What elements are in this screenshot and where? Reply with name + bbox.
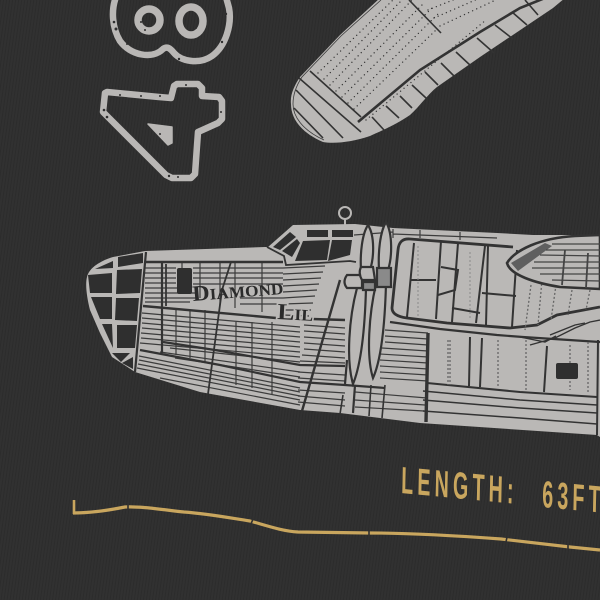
nose art: Diamond Lil: LIL	[277, 299, 314, 326]
antenna loop	[339, 207, 351, 225]
fuselage thin panel lines	[137, 229, 497, 411]
propeller	[344, 222, 391, 384]
number 8 outline	[113, 0, 230, 61]
number 4 outline	[103, 84, 222, 178]
nose glazing panes	[88, 253, 143, 369]
rivet lines on aft fuselage	[418, 246, 590, 392]
aft fuselage window	[556, 363, 578, 379]
wing rivet rows	[318, 0, 500, 120]
engine nacelle	[390, 239, 600, 435]
aircraft fuselage	[86, 207, 600, 437]
wing structure lines	[294, 0, 545, 138]
length label: LENGTH:	[401, 460, 518, 513]
fuselage heavy structural lines	[135, 252, 385, 418]
nose art: Diamond Lil: DIAMOND	[191, 274, 284, 306]
top wing	[291, 0, 565, 143]
cockpit canopy panes	[267, 230, 356, 265]
length label	[401, 460, 600, 522]
fuselage side window	[177, 268, 192, 294]
dorsal turret	[507, 235, 600, 289]
nose art: Diamond Lil	[191, 274, 314, 326]
fuselage body	[86, 224, 600, 437]
length dimension line	[73, 500, 600, 550]
